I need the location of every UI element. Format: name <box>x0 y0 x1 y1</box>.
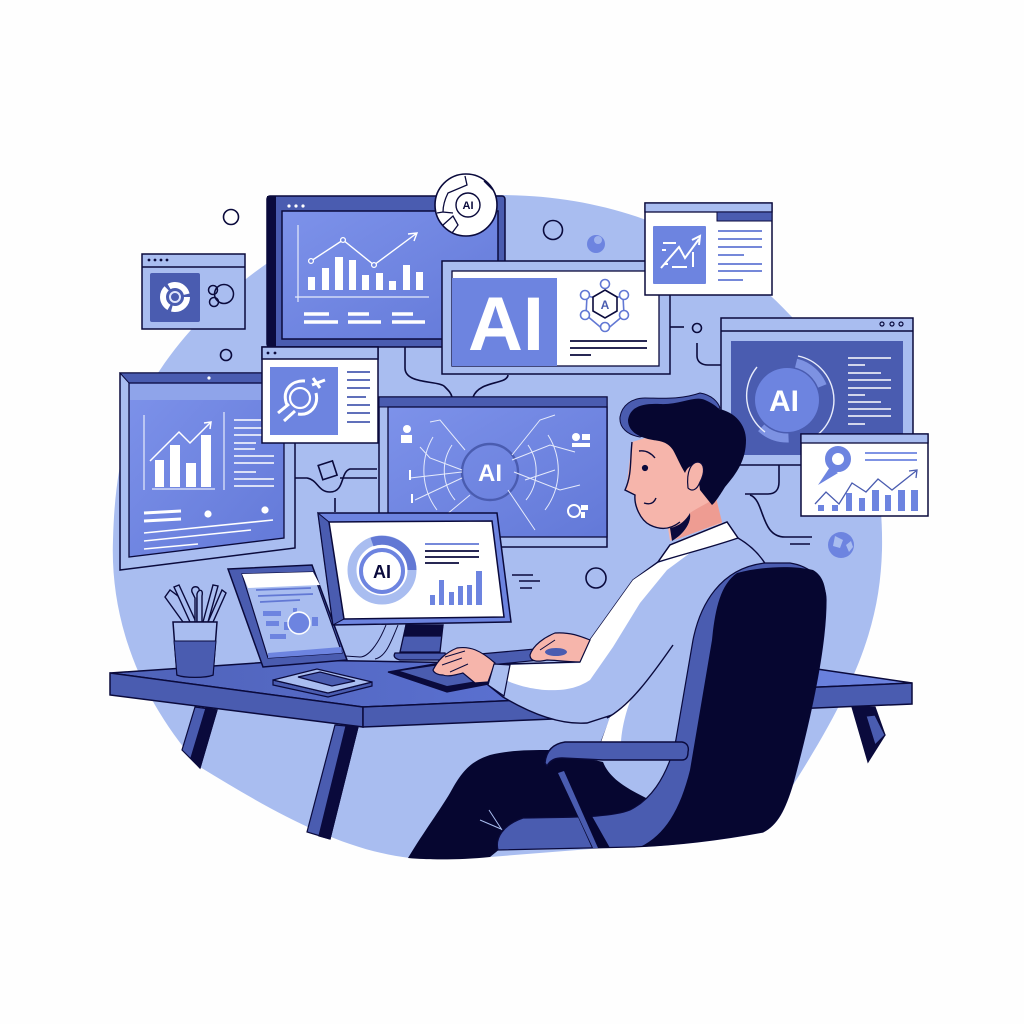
keyboard <box>388 649 540 692</box>
knee crease <box>480 810 502 830</box>
top monitor with chart <box>267 196 505 347</box>
pants <box>408 750 650 859</box>
shirt cuff <box>488 664 510 696</box>
network icon <box>580 280 628 332</box>
eye and mouth <box>639 451 656 504</box>
pencil cup <box>165 585 226 677</box>
AI dial <box>747 356 834 438</box>
notebook on desk <box>273 669 372 697</box>
armrest <box>545 742 688 766</box>
armrest post <box>558 770 610 848</box>
popup with magnifier icon <box>262 347 378 443</box>
background blob <box>113 195 882 858</box>
center radial AI monitor <box>379 397 607 547</box>
AI donut <box>352 540 412 600</box>
hands <box>433 633 590 683</box>
small window top left <box>142 254 245 329</box>
floating orbs <box>587 235 854 558</box>
connector cables <box>295 327 812 588</box>
lower right analytics popup <box>801 434 928 516</box>
radial diagram: AI <box>478 460 502 487</box>
desk monitor <box>318 513 511 660</box>
desk <box>110 660 912 839</box>
AI donut: AI <box>373 562 391 582</box>
big AI window: AI <box>468 282 544 367</box>
shirt highlight <box>505 553 690 690</box>
ear <box>688 462 704 490</box>
desk legs <box>182 707 885 839</box>
office chair <box>480 563 826 850</box>
screen glyphs <box>401 425 590 518</box>
left tilted monitor <box>120 373 295 570</box>
bar chart with text <box>144 412 274 549</box>
radial diagram <box>410 415 580 530</box>
AI dial: AI <box>769 385 799 418</box>
person <box>408 393 766 859</box>
collar <box>658 522 738 562</box>
AI badge circle <box>435 174 497 236</box>
tablet <box>228 565 347 667</box>
monitor stand <box>345 625 447 660</box>
hair <box>620 393 720 437</box>
right monitor with AI dial <box>721 318 913 465</box>
neck and face <box>626 435 722 541</box>
line and bar chart <box>295 225 429 322</box>
network icon: A <box>601 298 610 312</box>
torso shirt <box>488 522 766 745</box>
big AI window <box>442 261 670 374</box>
top right popup <box>645 203 772 295</box>
decorative circles <box>220 210 702 588</box>
AI badge circle: AI <box>462 200 474 212</box>
